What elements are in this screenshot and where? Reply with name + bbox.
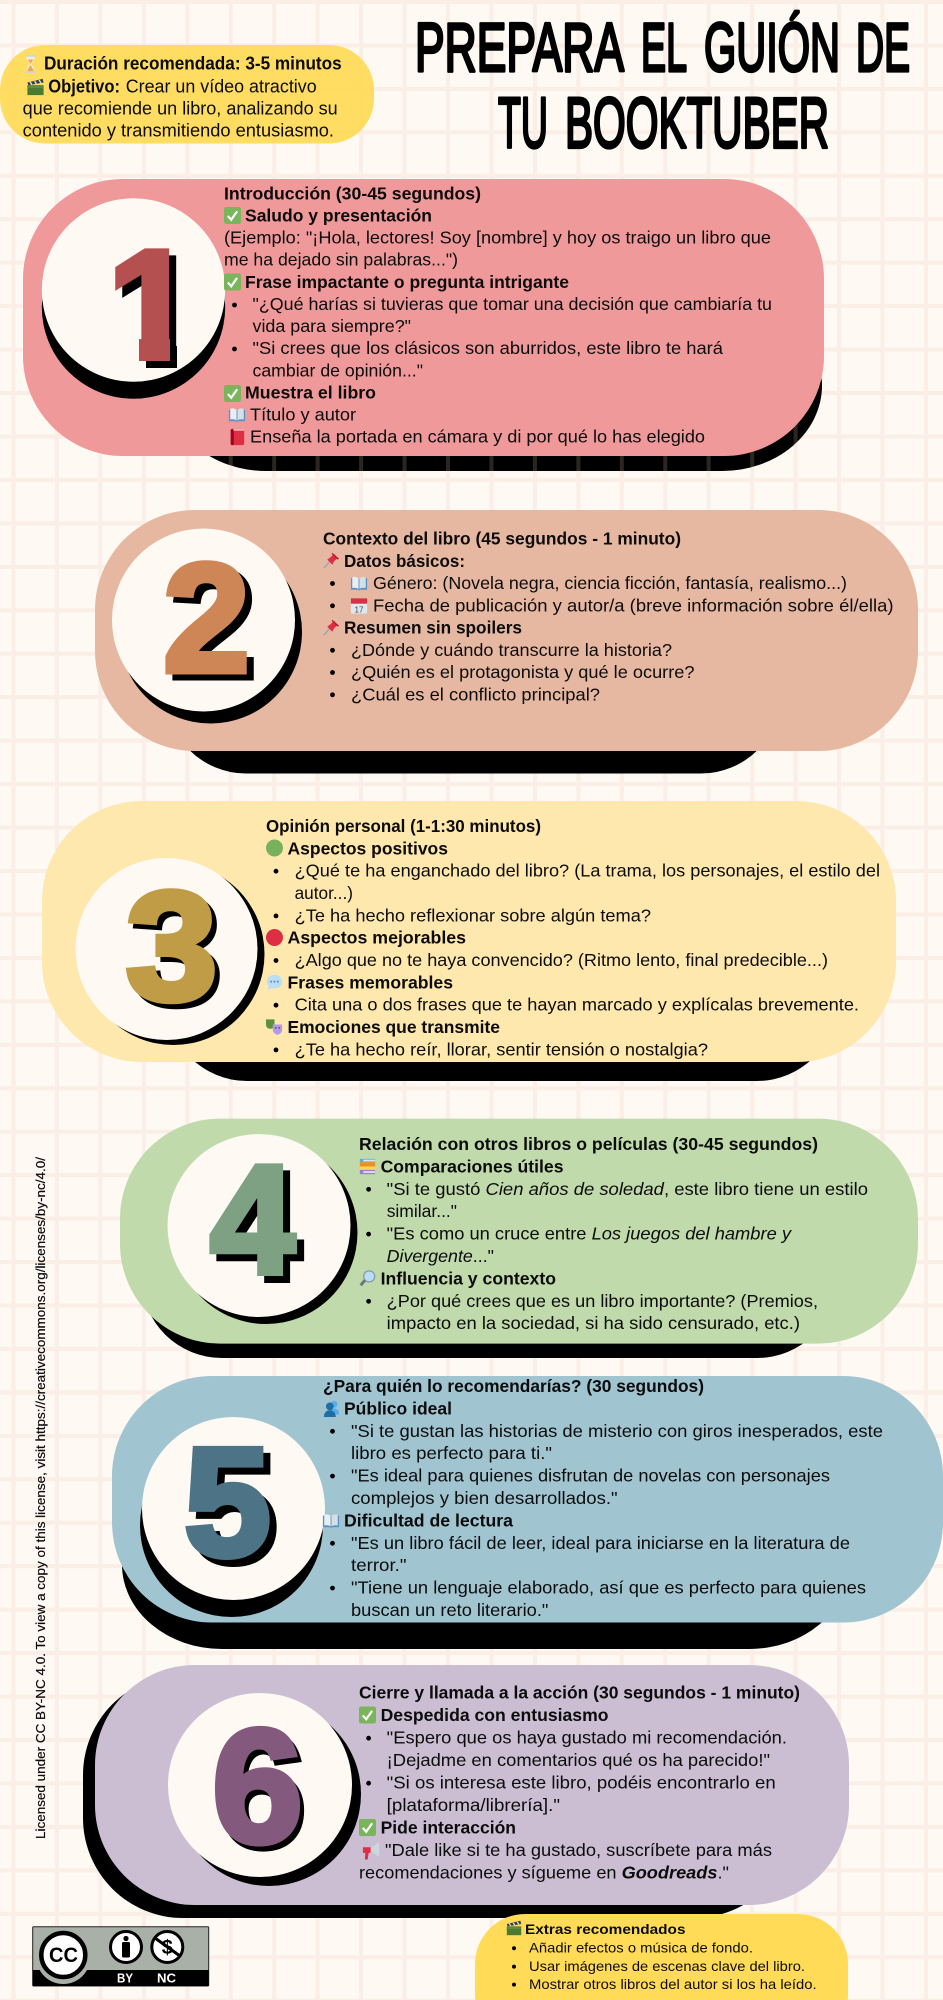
panel 1 text: Frase impactante o pregunta intrigante — [245, 272, 569, 292]
panel 5 text: complejos y bien desarrollados." — [351, 1488, 618, 1508]
extras list: Mostrar otros libros del autor si los ha leído. — [529, 1976, 817, 1992]
panel 4 text: ¿Por qué crees que es un libro importante? (Premios, — [387, 1291, 818, 1311]
panel 3 text: ¿Te ha hecho reflexionar sobre algún tema? — [295, 905, 651, 925]
icon: clapperboard — [507, 1921, 521, 1935]
panel 1 text: vida para siempre?" — [252, 316, 411, 336]
panel 6 text: recomendaciones y sígueme en Goodreads." — [359, 1863, 729, 1883]
panel 3 text: ¿Te ha hecho reír, llorar, sentir tensión o nostalgia? — [295, 1039, 708, 1059]
panel 4 text — [359, 1134, 868, 1333]
license text: Licensed under CC BY-NC 4.0. To view a copy of this license, visit https://creativecommons.org/licenses/by-nc/4.0/ — [34, 1156, 48, 1839]
panel 4 shadow — [142, 1200, 837, 1358]
title: GUIÓN — [704, 9, 840, 86]
panel 1 text: (Ejemplo: "¡Hola, lectores! Soy [nombre] y hoy os traigo un libro que — [224, 228, 771, 248]
panel 6: cierre y llamada a la acción — [83, 1665, 849, 1918]
panel 4 text: Comparaciones útiles — [381, 1156, 564, 1176]
number 1 badge: 1 — [108, 218, 196, 391]
panel 4 text: Divergente..." — [387, 1246, 494, 1266]
panel 6 text: Pide interacción — [381, 1818, 516, 1838]
panel 5 text: "Si te gustan las historias de misterio con giros inesperados, este — [351, 1421, 883, 1441]
extras list — [512, 1940, 817, 1992]
panel 4 background — [120, 1119, 918, 1344]
panel 1 text — [224, 183, 772, 447]
panel 2 background — [95, 510, 918, 751]
panel 5 text: ¿Para quién lo recomendarías? (30 segundos) — [323, 1376, 704, 1396]
panel 4 text: similar..." — [387, 1201, 457, 1221]
panel 4: relación con otros libros — [120, 1119, 918, 1358]
panel 2 text: ¿Dónde y cuándo transcurre la historia? — [351, 640, 672, 660]
panel 5 text: Público ideal — [344, 1398, 452, 1418]
panel 6 text — [359, 1683, 800, 1883]
panel 2 text: Datos básicos: — [344, 551, 465, 571]
panel 2 shadow — [166, 600, 781, 774]
number 2 badge: 2 — [170, 538, 257, 710]
panel 5 text: libro es perfecto para ti." — [351, 1443, 552, 1463]
panel 6 shadow — [83, 1675, 794, 1918]
panel 6 text: [plataforma/librería]." — [387, 1795, 560, 1815]
panel 3 text: Opinión personal (1-1:30 minutos) — [266, 816, 541, 836]
panel 3 shadow — [167, 900, 837, 1081]
panel 1 text: "Si crees que los clásicos son aburridos, este libro te hará — [252, 338, 723, 358]
icon: hourglass — [25, 55, 36, 73]
panel 4 text: "Si te gustó Cien años de soledad , este libro tiene un estilo — [387, 1179, 868, 1199]
panel 5 text — [323, 1376, 883, 1620]
panel 6 text: "Dale like si te ha gustado, suscríbete para más — [385, 1840, 772, 1860]
panel 3 text: ¿Qué te ha enganchado del libro? (La trama, los personajes, el estilo del — [295, 861, 880, 881]
number 1 badge — [42, 198, 225, 399]
panel 1 text: me ha dejado sin palabras...") — [224, 250, 458, 270]
objective text — [23, 77, 338, 141]
panel 1 background — [23, 179, 824, 456]
panel 1 text: cambiar de opinión..." — [252, 360, 423, 380]
number 6 badge: 6 — [212, 1696, 303, 1877]
panel 6 text: Despedida con entusiasmo — [381, 1705, 608, 1725]
panel 4 text: Influencia y contexto — [381, 1268, 556, 1288]
objective text: Objetivo: — [48, 77, 120, 97]
panel 4 text: impacto en la sociedad, si ha sido censurado, etc.) — [387, 1313, 800, 1333]
panel 2 text: Resumen sin spoilers — [344, 618, 522, 638]
duration line: Duración recomendada: 3-5 minutos — [44, 53, 342, 73]
panel 1 text: Saludo y presentación — [245, 205, 432, 225]
panel 2 text: Fecha de publicación y autor/a (breve información sobre él/ella) — [373, 595, 894, 615]
CC BY-NC badge — [33, 1927, 209, 1986]
icon: clapperboard — [27, 79, 44, 95]
extras background — [475, 1914, 848, 2000]
panel 3 text: Aspectos positivos — [288, 838, 448, 858]
CC BY-NC badge: $ — [162, 1937, 173, 1959]
number 3 badge: 3 — [126, 860, 218, 1032]
title: PREPARA — [415, 9, 624, 86]
number 2 badge: 2 — [163, 532, 250, 704]
panel 1 text: Enseña la portada en cámara y di por qué lo has elegido — [250, 427, 705, 447]
panel 2 text: ¿Quién es el protagonista y qué le ocurre? — [351, 662, 695, 682]
panel 5 background — [112, 1376, 943, 1622]
title: EL — [641, 9, 687, 86]
panel 1 text: Muestra el libro — [245, 382, 376, 402]
number 4 badge — [168, 1133, 358, 1324]
callout: duration and objective — [0, 45, 374, 144]
panel 3 background — [42, 801, 896, 1062]
panel 2 text: ¿Cuál es el conflicto principal? — [351, 684, 600, 704]
objective text: que recomiende un libro, analizando su — [23, 99, 338, 119]
panel 3 text: Emociones que transmite — [288, 1017, 500, 1037]
panel 3 text: Frases memorables — [288, 972, 453, 992]
title: TU — [498, 84, 548, 164]
number 3 badge — [76, 858, 264, 1045]
panel 2 text: Contexto del libro (45 segundos - 1 minuto) — [323, 528, 681, 548]
panel 5 text: Dificultad de lectura — [344, 1510, 513, 1530]
panel 2 text — [323, 528, 894, 704]
number 4 badge: 4 — [217, 1140, 302, 1313]
panel 6 text: ¡Dejadme en comentarios qué os ha parecido!" — [387, 1750, 770, 1770]
panel 1 text: Título y autor — [250, 404, 356, 424]
extras heading: Extras recomendados — [525, 1921, 686, 1937]
panel 6 text: "Si os interesa este libro, podéis encontrarlo en — [387, 1773, 776, 1793]
objective text: Crear un vídeo atractivo — [126, 77, 317, 97]
panel 1 shadow — [166, 300, 822, 471]
callout: extras recomendados — [475, 1914, 848, 2000]
number 6 badge: 6 — [216, 1701, 307, 1882]
panel 4 text: "Es como un cruce entre Los juegos del hambre y — [387, 1224, 792, 1244]
panel 3 text: ¿Algo que no te haya convencido? (Ritmo lento, final predecible...) — [295, 950, 828, 970]
panel 5 text: terror." — [351, 1555, 406, 1575]
CC BY-NC badge: NC — [157, 1972, 176, 1986]
number 1 badge: 1 — [114, 225, 202, 398]
panel 5 text: "Es un libro fácil de leer, ideal para iniciarse en la literatura de — [351, 1533, 850, 1553]
panel 2: contexto del libro — [95, 510, 918, 774]
extras list: Añadir efectos o música de fondo. — [529, 1940, 753, 1956]
CC BY-NC badge: BY — [117, 1972, 134, 1986]
title — [415, 9, 910, 164]
panel 3 text — [266, 816, 880, 1059]
objective text: contenido y transmitiendo entusiasmo. — [23, 121, 334, 141]
panel 3 text: Cita una o dos frases que te hayan marcado y explícalas brevemente. — [295, 995, 859, 1015]
number 5 badge: 5 — [184, 1416, 271, 1588]
number 5 badge — [140, 1416, 325, 1617]
panel 1 text: Introducción (30-45 segundos) — [224, 183, 481, 203]
panel 4 text: Relación con otros libros o películas (30-45 segundos) — [359, 1134, 818, 1154]
panel 3 text: Aspectos mejorables — [288, 928, 466, 948]
panel 5: para quién lo recomendarías — [112, 1376, 943, 1649]
panel 5 shadow — [122, 1480, 849, 1649]
panel 5 text: "Es ideal para quienes disfrutan de novelas con personajes — [351, 1466, 830, 1486]
panel 3 text: autor...) — [295, 883, 353, 903]
extras list: Usar imágenes de escenas clave del libro. — [529, 1958, 805, 1974]
panel 1: introducción — [23, 179, 824, 471]
number 4 badge: 4 — [210, 1133, 295, 1306]
CC BY-NC badge: CC — [49, 1944, 78, 1967]
panel 6 text: Cierre y llamada a la acción (30 segundos - 1 minuto) — [359, 1683, 800, 1703]
number 6 badge — [168, 1693, 361, 1886]
panel 6 text: "Espero que os haya gustado mi recomendación. — [387, 1728, 787, 1748]
panel 3: opinión personal — [42, 801, 896, 1081]
panel 5 text: "Tiene un lenguaje elaborado, así que es perfecto para quienes — [351, 1578, 866, 1598]
panel 1 text: "¿Qué harías si tuvieras que tomar una decisión que cambiaría tu — [252, 294, 772, 314]
callout background — [0, 45, 374, 144]
panel 6 background — [95, 1665, 849, 1905]
panel 5 text: buscan un reto literario." — [351, 1600, 548, 1620]
number 3 badge: 3 — [131, 864, 223, 1038]
panel 2 text: Género: (Novela negra, ciencia ficción, fantasía, realismo...) — [373, 573, 847, 593]
number 2 badge — [112, 528, 302, 724]
number 5 badge: 5 — [191, 1422, 278, 1596]
